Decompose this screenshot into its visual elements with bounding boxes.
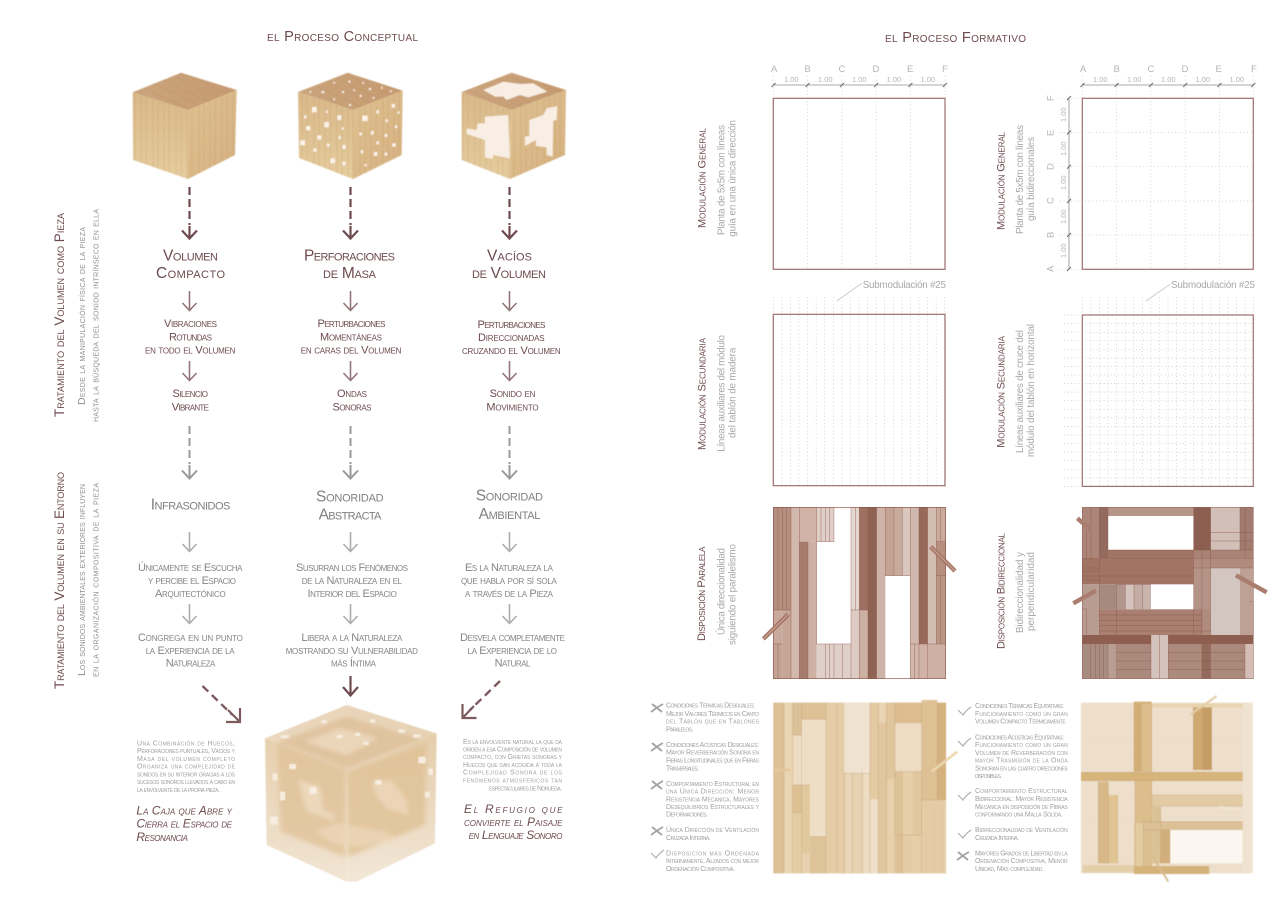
text: perturbaciones direccionadas: Direccionadas bbox=[478, 332, 545, 344]
arrows: grey dashed bbox=[182, 426, 517, 478]
text block: la caja que abre: Perforaciones puntuales, Vacíos y bbox=[137, 748, 236, 755]
text: perturbaciones momentáneas: Perturbaciones bbox=[318, 318, 386, 330]
plan grid: modulación secundaria bidireccional bbox=[1064, 297, 1253, 486]
text: libera a la naturaleza: más Íntima bbox=[331, 656, 377, 670]
list item 2: acústicas equitativas: Volumen de Reverberación con bbox=[975, 750, 1068, 757]
heading: infrasonidos: Infrasonidos bbox=[151, 496, 230, 514]
text block: la caja que abre: Resonancia bbox=[136, 830, 188, 844]
plan grid: modulación general bidireccional: 1.00 bbox=[1196, 75, 1210, 84]
text: vibraciones rotundas: en todo el Volumen bbox=[145, 344, 236, 356]
plan grid: modulación general bidireccional: 1.00 bbox=[1059, 243, 1068, 258]
text: ondas sonoras bbox=[332, 388, 372, 414]
column 3 heading: vacíos de volumen bbox=[472, 248, 546, 282]
plan grid: modulación general unidireccional: C bbox=[838, 64, 846, 75]
label: modulación general, bidireccional: guía bidireccionales bbox=[1026, 137, 1037, 221]
list item 1: térmicas equitativas: Condiciones Térmicas Equitativas: bbox=[975, 703, 1064, 710]
text: ondas sonoras: Sonoras bbox=[332, 402, 372, 414]
plan grid: modulación general bidireccional: 1.00 bbox=[1161, 75, 1176, 84]
label: disposición bidireccional: Bidireccionalidad y bbox=[1015, 552, 1026, 633]
list item 5: grados de libertad bbox=[957, 850, 1068, 873]
list item 1: condiciones térmicas: del Tablón que en Tablones bbox=[666, 718, 760, 726]
list item 2: condiciones acústicas bbox=[651, 742, 760, 772]
side heading: tratamiento del volumen como pieza: hasta la búsqueda del sonido intrínseco en ella bbox=[90, 209, 102, 422]
list item 3: estructural bidireccional: Comportamiento Estructural bbox=[975, 788, 1068, 795]
text: libera a la naturaleza bbox=[286, 632, 418, 670]
label: disposición paralela bbox=[696, 543, 738, 645]
illustration: final translucent cube bbox=[265, 705, 437, 882]
list item 2: condiciones acústicas: Fibras Longitudinales que en Fibras bbox=[666, 758, 760, 764]
label: disposición paralela: Única direccionalidad bbox=[716, 548, 728, 635]
list item 2: acústicas equitativas bbox=[958, 734, 1068, 780]
text: sonido en movimiento bbox=[486, 388, 539, 414]
list item 2: condiciones acústicas: Trasversales. bbox=[666, 766, 699, 772]
text block: el refugio: espectaculares de Noruega. bbox=[489, 786, 562, 792]
checklist: bidirectional disposition properties bbox=[957, 703, 1068, 873]
plan grid: modulación general bidireccional: C bbox=[1046, 197, 1056, 204]
side heading: tratamiento del volumen en su entorno: en la organización compositiva de la pieza bbox=[90, 483, 102, 677]
text: únicamente se escucha: Arquitectónico bbox=[155, 588, 226, 600]
text: desvela completamente: Natural bbox=[495, 658, 531, 670]
text block: el refugio: Complejidad Sonora de los bbox=[463, 770, 563, 776]
label: modulación secundaria bidireccional bbox=[996, 324, 1037, 457]
text block: la caja que abre: la envolvente de la propia pieza. bbox=[137, 787, 220, 794]
list item 3: estructural bidireccional: Bidireccional: Mayor Resistencia bbox=[975, 796, 1068, 803]
arrows: grey thin row 1 bbox=[182, 532, 516, 552]
side heading: tratamiento del volumen como pieza bbox=[52, 209, 102, 422]
icon: cube with perforations bbox=[298, 73, 403, 179]
text block: el refugio: origen a esa Composición de volumen bbox=[463, 746, 562, 754]
wood plan: disposición paralela bbox=[763, 507, 955, 679]
plan grid: modulación general bidireccional: A bbox=[1080, 64, 1087, 75]
column 3 heading: vacíos de volumen: de Volumen bbox=[472, 265, 546, 282]
plan grid: modulación general unidireccional: A bbox=[771, 64, 778, 75]
list item 1: condiciones térmicas: Paralelos. bbox=[666, 726, 693, 734]
heading: sonoridad abstracta: Abstracta bbox=[319, 506, 382, 524]
text block: el refugio: Huecos que dan acogida a toda la bbox=[463, 762, 563, 769]
wood plan: disposición bidireccional bbox=[1073, 507, 1267, 679]
list item 3: comportamiento estructural: Desequilibrios Estructurales y bbox=[666, 804, 760, 811]
text: desvela completamente: Desvela completamente bbox=[460, 632, 565, 644]
list item 5: grados de libertad: Ordenación Compositiva, Menor bbox=[975, 858, 1068, 865]
text: vibraciones rotundas: Vibraciones bbox=[164, 318, 217, 330]
label: modulación general, dirección única: Modulación General bbox=[696, 127, 708, 228]
list item 1: térmicas equitativas bbox=[958, 703, 1068, 726]
list item 2: acústicas equitativas: Sonoran en las cuatro direcciones bbox=[975, 766, 1068, 772]
list item 5: disposición: Ordenación Compositiva. bbox=[666, 866, 735, 873]
text block: la caja que abre: Organiza una complejidad de bbox=[137, 764, 236, 770]
text: libera a la naturaleza: Libera a la Naturaleza bbox=[301, 632, 403, 644]
text block: el refugio: El Refugio que bbox=[464, 802, 563, 816]
text: perturbaciones momentáneas: en caras del Volumen bbox=[301, 344, 402, 356]
heading: sonoridad abstracta bbox=[316, 488, 384, 524]
plan grid: modulación general unidireccional: B bbox=[804, 64, 811, 75]
text: congrega en un punto bbox=[138, 632, 243, 670]
plan grid: modulación general bidireccional: B bbox=[1114, 64, 1120, 75]
photo: bidirectional wood model bbox=[1081, 696, 1253, 882]
arrows: dark dashed from cubes bbox=[182, 187, 517, 238]
label: modulación secundaria bidireccional: Modulación Secundaria bbox=[996, 335, 1008, 448]
plan grid: modulación general bidireccional bbox=[1046, 64, 1257, 272]
title: el Proceso Formativo: el Proceso Formativo bbox=[885, 30, 1026, 46]
text: silencio vibrante: Silencio bbox=[172, 388, 208, 400]
plan grid: modulación general unidireccional: E bbox=[907, 64, 913, 75]
list item 3: estructural bidireccional: Mecánica en disposición de Fibras bbox=[975, 804, 1068, 811]
text: únicamente se escucha: y percibe el Espacio bbox=[148, 575, 236, 587]
text block: la caja que abre: sucesos sonoros llevados a cabo en bbox=[137, 779, 235, 786]
text: silencio vibrante bbox=[172, 388, 209, 414]
callout: submodulación 25, right: Submodulación #25 bbox=[1171, 280, 1256, 291]
side heading: tratamiento del volumen en su entorno: Los sonidos ambientales exteriores influyen bbox=[76, 484, 88, 676]
icon: cube compact volume bbox=[133, 73, 237, 179]
text: es la naturaleza: a través de la Pieza bbox=[465, 588, 554, 600]
list item 5: disposición: Disposicion más Ordenada bbox=[666, 850, 760, 858]
column 2 heading: perforaciones de masa bbox=[304, 248, 395, 282]
label: modulación general, bidireccional bbox=[996, 125, 1037, 234]
arrows: grey thin row 2 bbox=[182, 604, 516, 624]
photo: parallel wood model bbox=[773, 700, 957, 873]
label: modulación secundaria bidireccional: módulo del tablón en horizontal bbox=[1026, 324, 1037, 457]
text: es la naturaleza: Es la Naturaleza la bbox=[465, 562, 554, 574]
list item 2: acústicas equitativas: mayor Trasmisión de la Onda bbox=[975, 758, 1068, 764]
text block: el refugio: compacto, con Grietas sonoras y bbox=[463, 754, 563, 761]
list item 4: ventilación: Cruzada Interna. bbox=[975, 835, 1019, 842]
text block: el refugio bbox=[463, 739, 563, 842]
list item 3: comportamiento estructural: Deformaciones. bbox=[666, 812, 708, 818]
column 2 heading: perforaciones de masa: de Masa bbox=[323, 265, 377, 282]
text: libera a la naturaleza: mostrando su Vulnerabilidad bbox=[286, 645, 418, 657]
text: perturbaciones direccionadas: Perturbaciones bbox=[478, 319, 546, 331]
label: modulación secundaria paralela bbox=[696, 334, 738, 452]
label: modulación general, dirección única: guía en una única dirección bbox=[728, 120, 738, 237]
heading: sonoridad abstracta: Sonoridad bbox=[316, 488, 384, 506]
text: congrega en un punto: Congrega en un punto bbox=[138, 632, 243, 644]
text block: la caja que abre: La Caja que Abre y bbox=[136, 804, 233, 818]
text: congrega en un punto: Naturaleza bbox=[166, 658, 216, 670]
text: sonido en movimiento: Movimiento bbox=[486, 402, 539, 414]
plan grid: modulación general bidireccional: D bbox=[1046, 163, 1056, 170]
list item 5: disposición: Internamente, Alzados con mejor bbox=[666, 858, 759, 865]
list item 4: ventilación: Bidireccionalidad de Ventilación bbox=[975, 827, 1068, 834]
checklist: parallel disposition properties bbox=[651, 702, 760, 873]
text: ondas sonoras: Ondas bbox=[337, 388, 367, 400]
list item 4: ventilación bbox=[651, 825, 759, 842]
list item 1: condiciones térmicas bbox=[651, 702, 760, 734]
label: modulación general, bidireccional: Planta de 5x5m con líneas bbox=[1015, 125, 1026, 234]
plan grid: modulación general unidireccional: 1.00 bbox=[886, 75, 901, 84]
list item 2: condiciones acústicas: Condiciones Acústicas Desiguales: bbox=[666, 742, 759, 749]
label: modulación secundaria paralela: Modulación Secundaria bbox=[696, 337, 708, 450]
text: perturbaciones momentáneas bbox=[301, 318, 402, 356]
plan grid: modulación general bidireccional: A bbox=[1046, 265, 1056, 272]
list item 2: acústicas equitativas: Condiciones Acústicas Equitativas: bbox=[975, 734, 1064, 742]
column 1 heading: volumen compacto bbox=[156, 248, 225, 282]
plan grid: modulación general unidireccional: 1.00 bbox=[818, 75, 833, 84]
label: modulación general, dirección única bbox=[696, 120, 738, 237]
text: perturbaciones direccionadas: cruzando el Volumen bbox=[462, 345, 561, 357]
heading: sonoridad ambiental bbox=[476, 488, 543, 523]
callout: submodulación 25, right bbox=[1146, 280, 1256, 301]
plan grid: modulación general bidireccional: 1.00 bbox=[1059, 209, 1068, 224]
text block: la caja que abre: Cierra el Espacio de bbox=[136, 816, 233, 830]
label: modulación secundaria paralela: Líneas auxiliares del módulo bbox=[716, 334, 728, 452]
text: es la naturaleza: que habla por sí sola bbox=[461, 575, 557, 587]
text: desvela completamente: la Experiencia de lo bbox=[468, 645, 557, 657]
text: susurran los fenómenos bbox=[296, 562, 408, 600]
plan grid: modulación general bidireccional: 1.00 bbox=[1230, 75, 1244, 84]
text block: la caja que abre: Una Combinación de Huecos, bbox=[137, 740, 235, 748]
label: modulación secundaria bidireccional: Líneas auxiliares de cruce del bbox=[1015, 330, 1026, 453]
list item 5: grados de libertad: Unidad, Más complejidad. bbox=[975, 866, 1044, 873]
list item 1: condiciones térmicas: Mejor Valores Térmicos en Canto bbox=[666, 711, 759, 718]
text block: el refugio: convierte el Paisaje bbox=[464, 815, 563, 829]
text: perturbaciones direccionadas bbox=[462, 319, 561, 357]
plan grid: modulación general bidireccional: 1.00 bbox=[1127, 75, 1142, 84]
plan grid: modulación general unidireccional: 1.00 bbox=[852, 75, 867, 84]
column 3 heading: vacíos de volumen: Vacíos bbox=[487, 248, 532, 264]
text: sonido en movimiento: Sonido en bbox=[490, 388, 536, 400]
list item 3: estructural bidireccional bbox=[958, 788, 1068, 818]
title: el Proceso Conceptual: el Proceso Conceptual bbox=[267, 29, 418, 45]
text: congrega en un punto: la Experiencia de la bbox=[146, 645, 235, 657]
text block: la caja que abre: Masa del volumen completo bbox=[137, 756, 235, 763]
plan grid: modulación general bidireccional: F bbox=[1251, 64, 1257, 75]
list item 2: acústicas equitativas: Funcionamiento como un gran bbox=[975, 742, 1068, 749]
text block: la caja que abre bbox=[136, 740, 236, 844]
label: modulación general, dirección única: Planta de 5x5m con líneas bbox=[716, 125, 728, 235]
icon: cube with voids bbox=[462, 73, 566, 179]
plan grid: modulación general unidireccional: 1.00 bbox=[784, 75, 799, 84]
arrows: thin row 2 bbox=[182, 361, 516, 380]
plan grid: modulación general unidireccional: 1.00 bbox=[920, 75, 935, 84]
list item 1: térmicas equitativas: Funcionamiento como un gran bbox=[975, 711, 1068, 718]
list item 3: estructural bidireccional: conformando una Malla Sólida. bbox=[975, 812, 1063, 818]
plan grid: modulación general bidireccional: E bbox=[1046, 130, 1056, 136]
text: desvela completamente bbox=[460, 632, 565, 670]
list item 1: condiciones térmicas: Condiciones Térmicas Desiguales: bbox=[666, 702, 755, 710]
text: únicamente se escucha bbox=[138, 561, 243, 600]
plan grid: modulación general bidireccional: F bbox=[1046, 95, 1056, 101]
text block: el refugio: fenómenos atmosféricos tan bbox=[463, 778, 562, 784]
side heading: tratamiento del volumen en su entorno bbox=[52, 472, 102, 689]
text: vibraciones rotundas: Rotundas bbox=[169, 332, 212, 344]
list item 3: comportamiento estructural: una Única Dirección: Menor bbox=[666, 786, 759, 796]
label: disposición bidireccional: Disposición Bidireccional bbox=[996, 532, 1008, 649]
text: vibraciones rotundas bbox=[145, 318, 236, 356]
plan grid: modulación general unidireccional: D bbox=[872, 64, 880, 75]
text: susurran los fenómenos: Susurran los Fenómenos bbox=[296, 562, 408, 574]
column 2 heading: perforaciones de masa: Perforaciones bbox=[304, 248, 395, 264]
heading: sonoridad ambiental: Ambiental bbox=[479, 506, 540, 523]
list item 3: comportamiento estructural: Resistencia Mecánica, Mayores bbox=[666, 796, 760, 804]
text: perturbaciones momentáneas: Momentáneas bbox=[320, 332, 382, 344]
list item 3: comportamiento estructural bbox=[651, 781, 760, 818]
plan grid: modulación general bidireccional: 1.00 bbox=[1059, 175, 1068, 190]
plan grid: modulación general bidireccional: D bbox=[1182, 64, 1188, 75]
plan grid: modulación general bidireccional: 1.00 bbox=[1059, 107, 1068, 122]
label: disposición bidireccional bbox=[996, 532, 1037, 649]
side heading: tratamiento del volumen como pieza: Desde la manipulación física de la pieza bbox=[76, 227, 88, 405]
list item 2: condiciones acústicas: Mayor Reverberación Sonora en bbox=[666, 750, 759, 756]
text: susurran los fenómenos: de la Naturaleza en el bbox=[302, 575, 403, 587]
callout: submodulación 25, left bbox=[837, 280, 947, 301]
text block: el refugio: Es la envolvente natural la que da bbox=[463, 739, 563, 746]
plan grid: modulación general bidireccional: B bbox=[1046, 232, 1056, 238]
plan grid: modulación secundaria unidireccional bbox=[773, 297, 945, 486]
heading: sonoridad ambiental: Sonoridad bbox=[476, 488, 543, 504]
label: modulación general, bidireccional: Modulación General bbox=[996, 131, 1008, 230]
list item 5: disposición bbox=[651, 850, 760, 873]
plan grid: modulación general unidireccional: F bbox=[942, 64, 948, 75]
text: es la naturaleza bbox=[461, 562, 557, 600]
column 1 heading: volumen compacto: Volumen bbox=[163, 248, 218, 264]
callout: submodulación 25, left: Submodulación #25 bbox=[863, 280, 947, 291]
list item 5: grados de libertad: Mayores Grados de Libertad en la bbox=[975, 850, 1068, 858]
side heading: tratamiento del volumen como pieza: Tratamiento del Volumen como Pieza bbox=[52, 213, 67, 417]
side heading: tratamiento del volumen en su entorno: Tratamiento del Volumen en su Entorno bbox=[52, 472, 67, 689]
text: únicamente se escucha: Únicamente se Escucha bbox=[138, 561, 243, 574]
column 1 heading: volumen compacto: Compacto bbox=[156, 265, 225, 282]
list item 1: térmicas equitativas: Volumen Compacto Térmicamente bbox=[975, 718, 1066, 726]
plan grid: modulación general unidireccional bbox=[771, 64, 948, 269]
plan grid: modulación general bidireccional: 1.00 bbox=[1093, 75, 1108, 84]
label: disposición paralela: siguiendo el paralelismo bbox=[728, 543, 738, 645]
text: silencio vibrante: Vibrante bbox=[172, 402, 209, 414]
plan grid: modulación general bidireccional: E bbox=[1216, 64, 1222, 75]
list item 4: ventilación: Única Dirección de Ventilación bbox=[666, 825, 759, 834]
text: susurran los fenómenos: Interior del Espacio bbox=[308, 588, 397, 600]
list item 4: ventilación bbox=[958, 827, 1068, 842]
text block: el refugio: en Lenguaje Sonoro bbox=[469, 828, 562, 842]
plan grid: modulación general bidireccional: C bbox=[1148, 64, 1154, 75]
label: modulación secundaria paralela: del tablón de madera bbox=[728, 347, 738, 438]
list item 4: ventilación: Cruzada Interna. bbox=[666, 835, 711, 842]
label: disposición bidireccional: perpendicularidad bbox=[1026, 552, 1037, 631]
arrows: converging to final cube bbox=[202, 676, 500, 722]
text block: la caja que abre: sonidos en su interior gracias a los bbox=[137, 772, 236, 778]
arrows: thin row 1 bbox=[182, 291, 516, 310]
plan grid: modulación general bidireccional: 1.00 bbox=[1059, 141, 1068, 156]
list item 3: comportamiento estructural: Comportamiento Estructural en bbox=[666, 781, 759, 788]
label: disposición paralela: Disposición Paralela bbox=[696, 546, 708, 641]
list item 2: acústicas equitativas: disponibles. bbox=[975, 773, 1002, 780]
